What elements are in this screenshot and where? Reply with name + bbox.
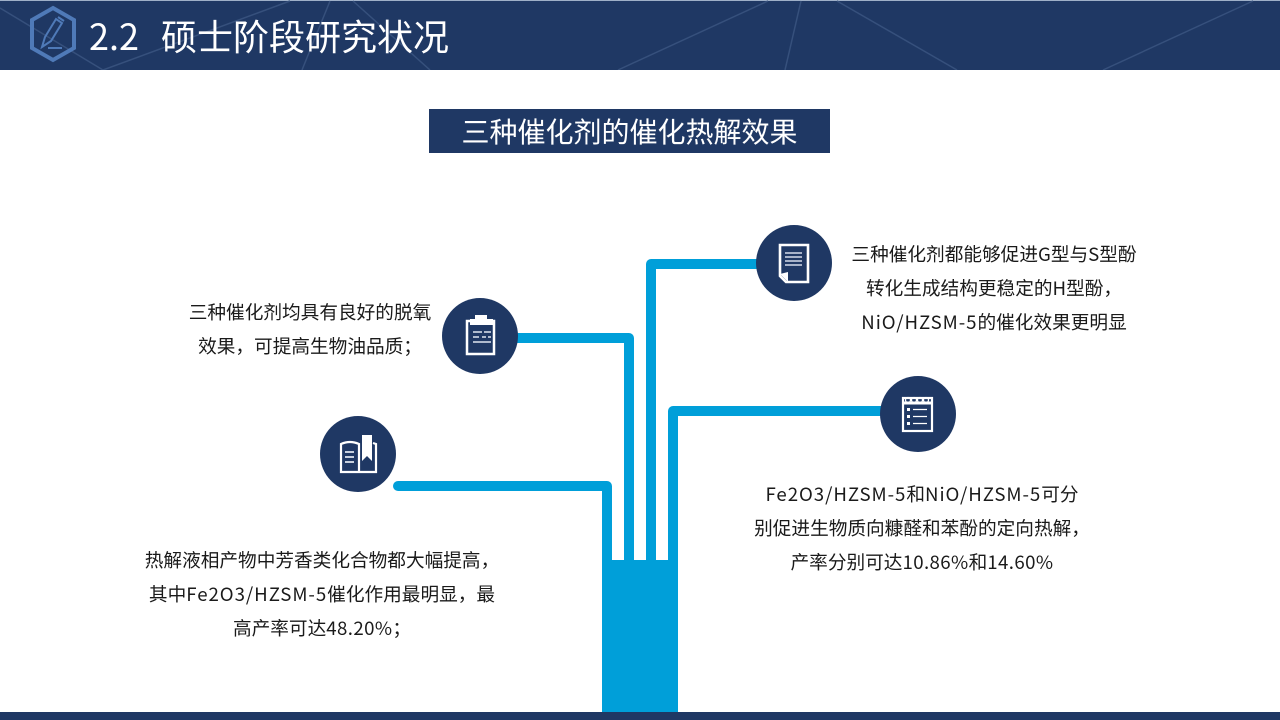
- text: top left: [189, 298, 431, 359]
- header bar: [0, 0, 1280, 70]
- title: 2.2: [89, 9, 139, 61]
- text: top right: 转化生成结构更稳定的H型酚，: [866, 274, 1122, 301]
- text: bottom right: [754, 480, 1090, 575]
- footer bar: [0, 712, 1280, 720]
- icon: open book: [320, 416, 396, 492]
- text: bottom left: 高产率可达48.20%；: [233, 614, 411, 641]
- icon: clipboard: [442, 298, 518, 374]
- text: bottom left: [145, 546, 499, 641]
- text: bottom right: Fe2O3/HZSM-5和NiO/HZSM-5可分: [765, 480, 1079, 507]
- text: top right: [851, 240, 1137, 335]
- subtitle banner: 三种催化剂的催化热解效果: [461, 111, 798, 151]
- text: bottom right: 别促进生物质向糠醛和苯酚的定向热解，: [754, 514, 1090, 541]
- text: top left: 三种催化剂均具有良好的脱氧: [189, 298, 431, 325]
- icon: document: [756, 225, 832, 301]
- text: top left: 效果，可提高生物油品质；: [198, 332, 422, 359]
- title: 硕士阶段研究状况: [161, 9, 449, 61]
- text: bottom left: 热解液相产物中芳香类化合物都大幅提高，: [145, 546, 499, 573]
- icon: notepad checklist: [880, 376, 956, 452]
- icon: hexagon pencil: [30, 6, 76, 62]
- text: bottom right: 产率分别可达10.86%和14.60%: [791, 548, 1053, 575]
- text: bottom left: 其中Fe2O3/HZSM-5催化作用最明显，最: [149, 580, 495, 607]
- text: top right: NiO/HZSM-5的催化效果更明显: [861, 308, 1127, 335]
- text: top right: 三种催化剂都能够促进G型与S型酚: [851, 240, 1137, 267]
